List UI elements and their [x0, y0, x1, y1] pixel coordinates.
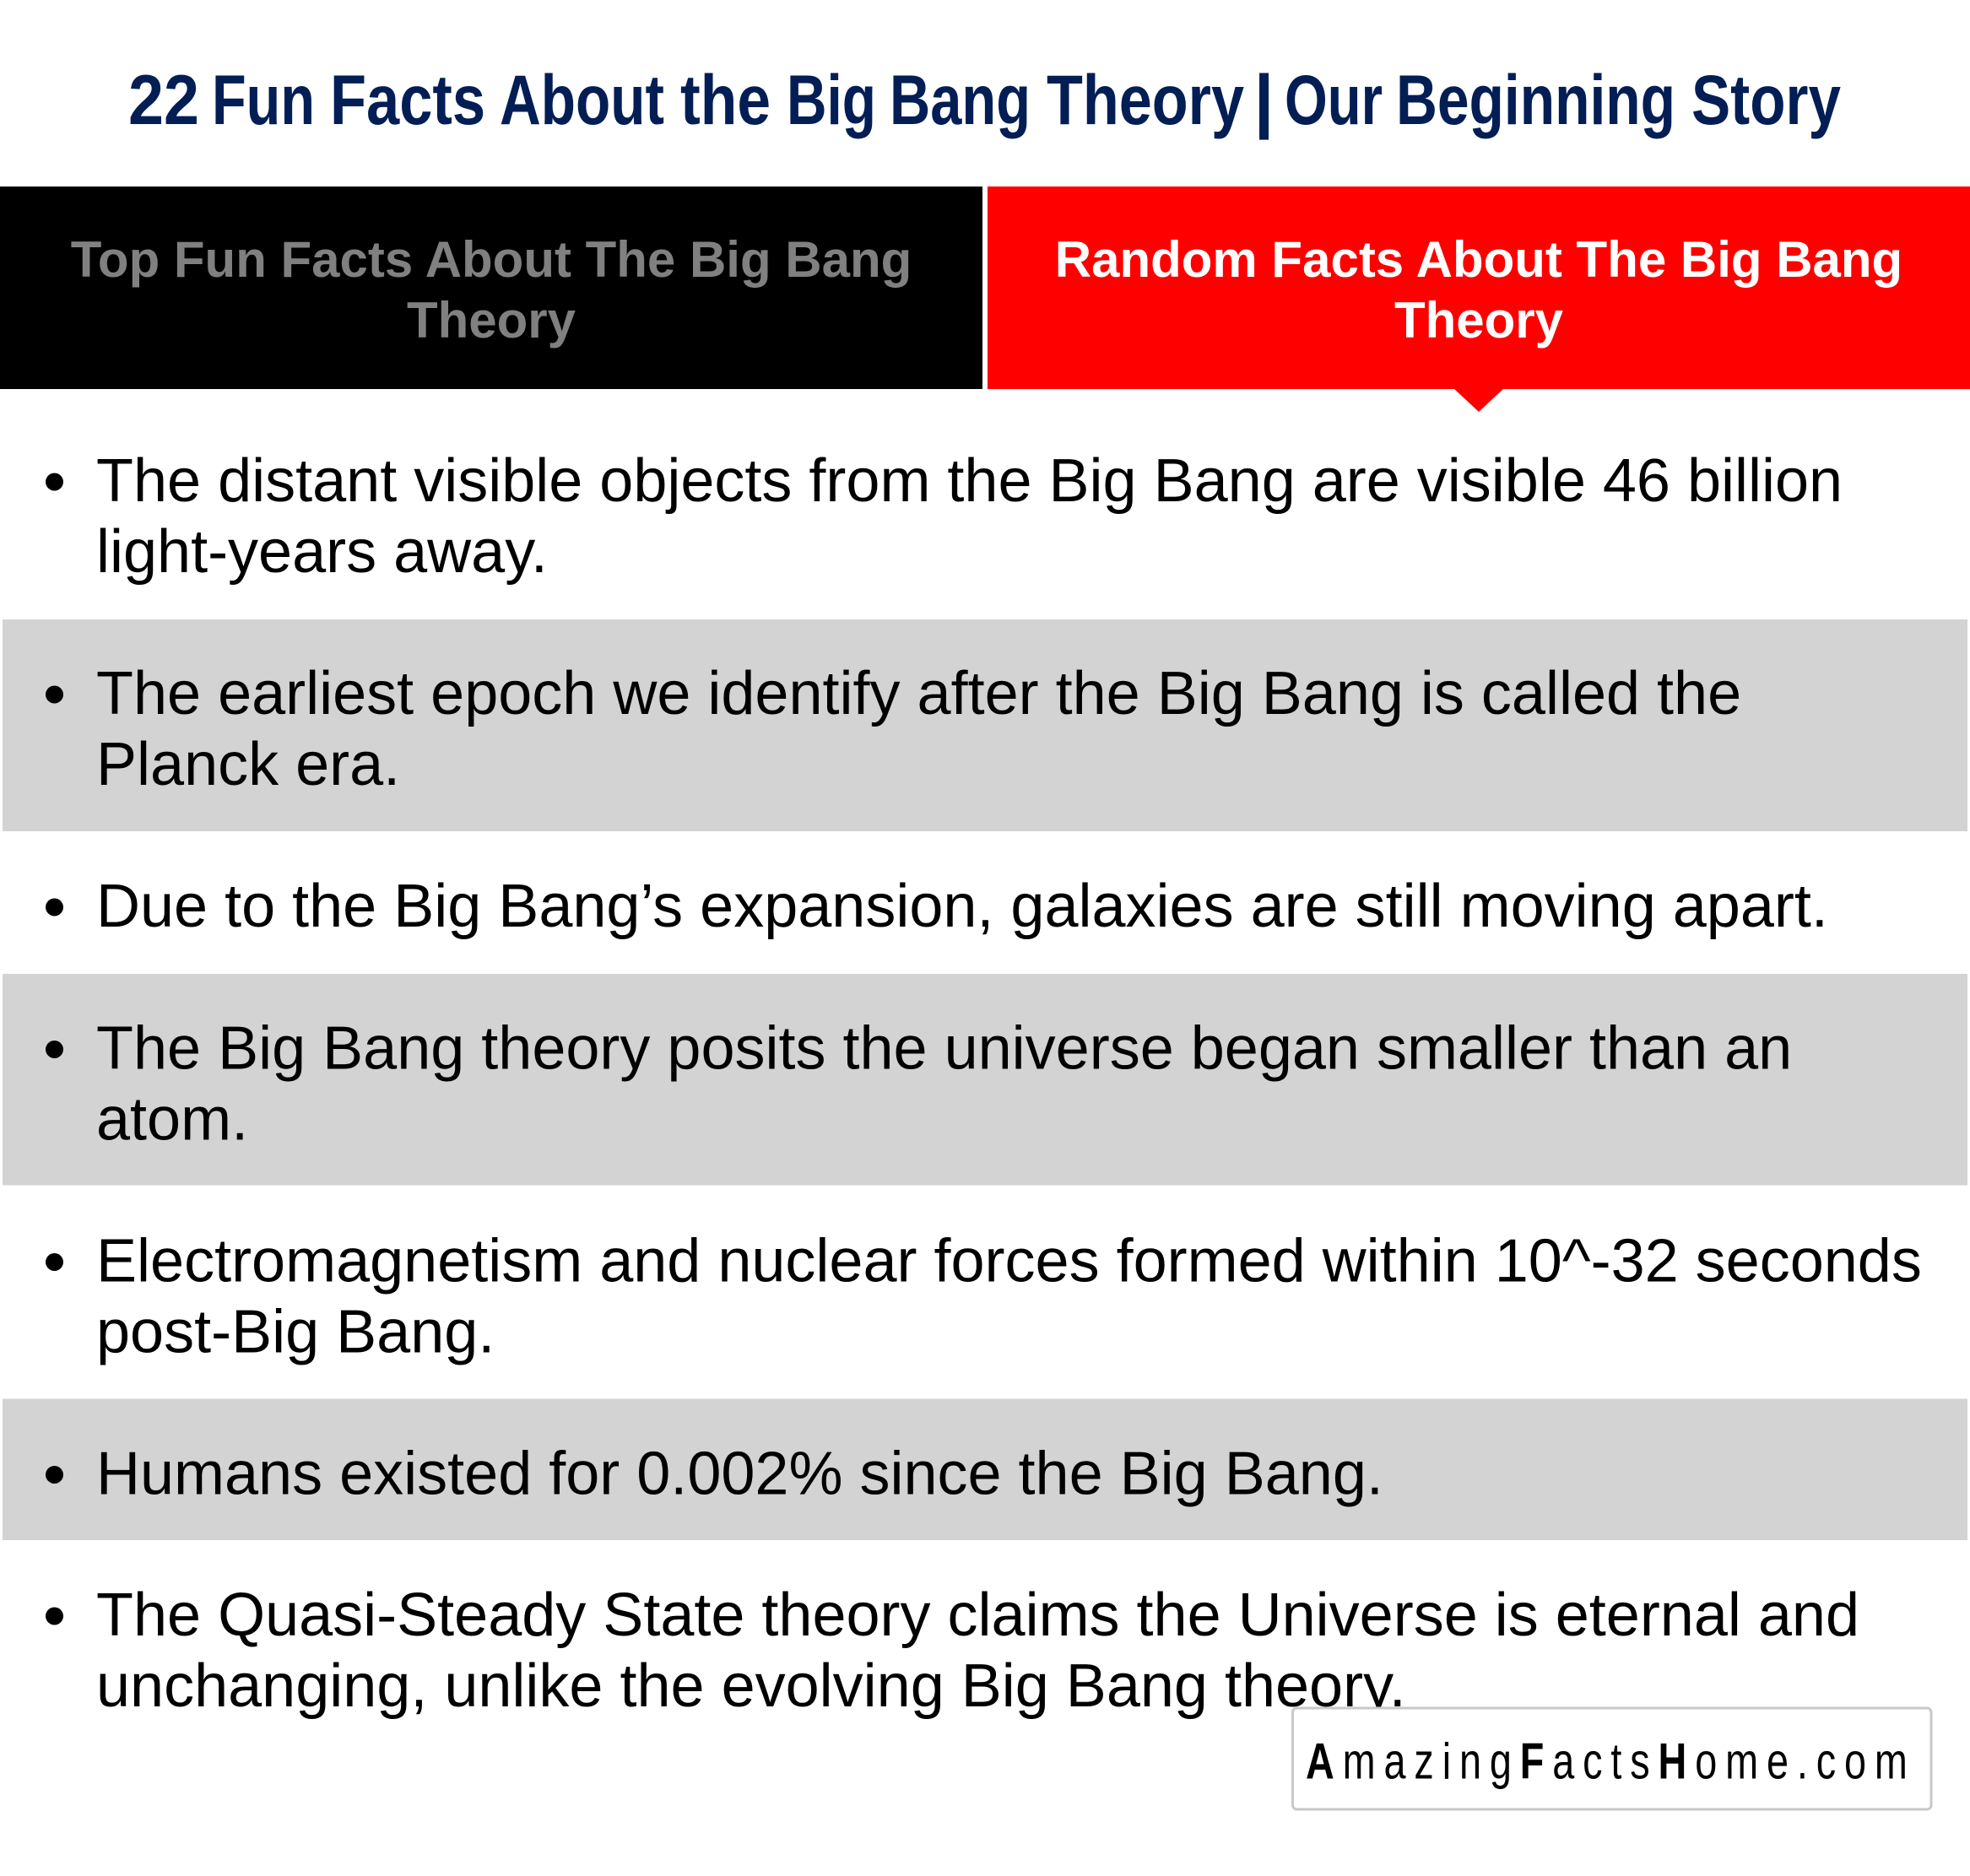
- title: Beginning: [1396, 61, 1675, 139]
- fact 5: [46, 1227, 1922, 1365]
- fact 5: post-Big Bang.: [96, 1298, 495, 1365]
- watermark: AmazingFactsHome.com: [1293, 1708, 1931, 1809]
- fact 2: Planck era.: [96, 731, 400, 798]
- fact 3: Due to the Big Bang’s expansion, galaxies are still moving apart.: [96, 873, 1828, 940]
- fact 4: [3, 974, 1967, 1185]
- title: 22: [128, 61, 199, 139]
- tab: top fun facts: Theory: [407, 292, 576, 349]
- tab: top fun facts: Top Fun Facts About The Big Bang: [71, 231, 912, 288]
- fact 2: [3, 619, 1967, 831]
- title: Our: [1285, 61, 1383, 139]
- title: the: [680, 61, 771, 139]
- fact 1: The distant visible objects from the Big Bang are visible 46 billion: [96, 447, 1843, 515]
- tab: top fun facts: [0, 187, 982, 389]
- title: |: [1254, 61, 1275, 140]
- fact 4: The Big Bang theory posits the universe began smaller than an: [96, 1014, 1792, 1082]
- title: Bang: [890, 61, 1031, 139]
- tab: random facts: Theory: [1394, 292, 1564, 349]
- title: Fun: [212, 61, 315, 139]
- fact 1: [46, 447, 1843, 586]
- tab: random facts: Random Facts About The Big Bang: [1055, 231, 1902, 288]
- fact 6: [3, 1399, 1967, 1540]
- fact 5: Electromagnetism and nuclear forces formed within 10^-32 seconds: [96, 1227, 1922, 1295]
- watermark: AmazingFactsHome.com: AmazingFactsHome.com: [1306, 1733, 1908, 1790]
- fact 7: [46, 1581, 1859, 1720]
- fact 6: Humans existed for 0.002% since the Big Bang.: [96, 1440, 1383, 1507]
- title: Big: [787, 61, 876, 139]
- title: Facts: [330, 61, 485, 139]
- tab: random facts: [988, 187, 1970, 412]
- fact 7: unchanging, unlike the evolving Big Bang theory.: [96, 1652, 1406, 1720]
- title: [128, 61, 1841, 140]
- title: Story: [1691, 61, 1841, 139]
- title: About: [500, 61, 664, 139]
- fact 2: The earliest epoch we identify after the Big Bang is called the: [96, 660, 1741, 727]
- fact 4: atom.: [96, 1085, 248, 1153]
- fact 7: The Quasi-Steady State theory claims the Universe is eternal and: [96, 1581, 1859, 1649]
- title: Theory: [1047, 61, 1244, 139]
- fact 1: light-years away.: [96, 518, 548, 586]
